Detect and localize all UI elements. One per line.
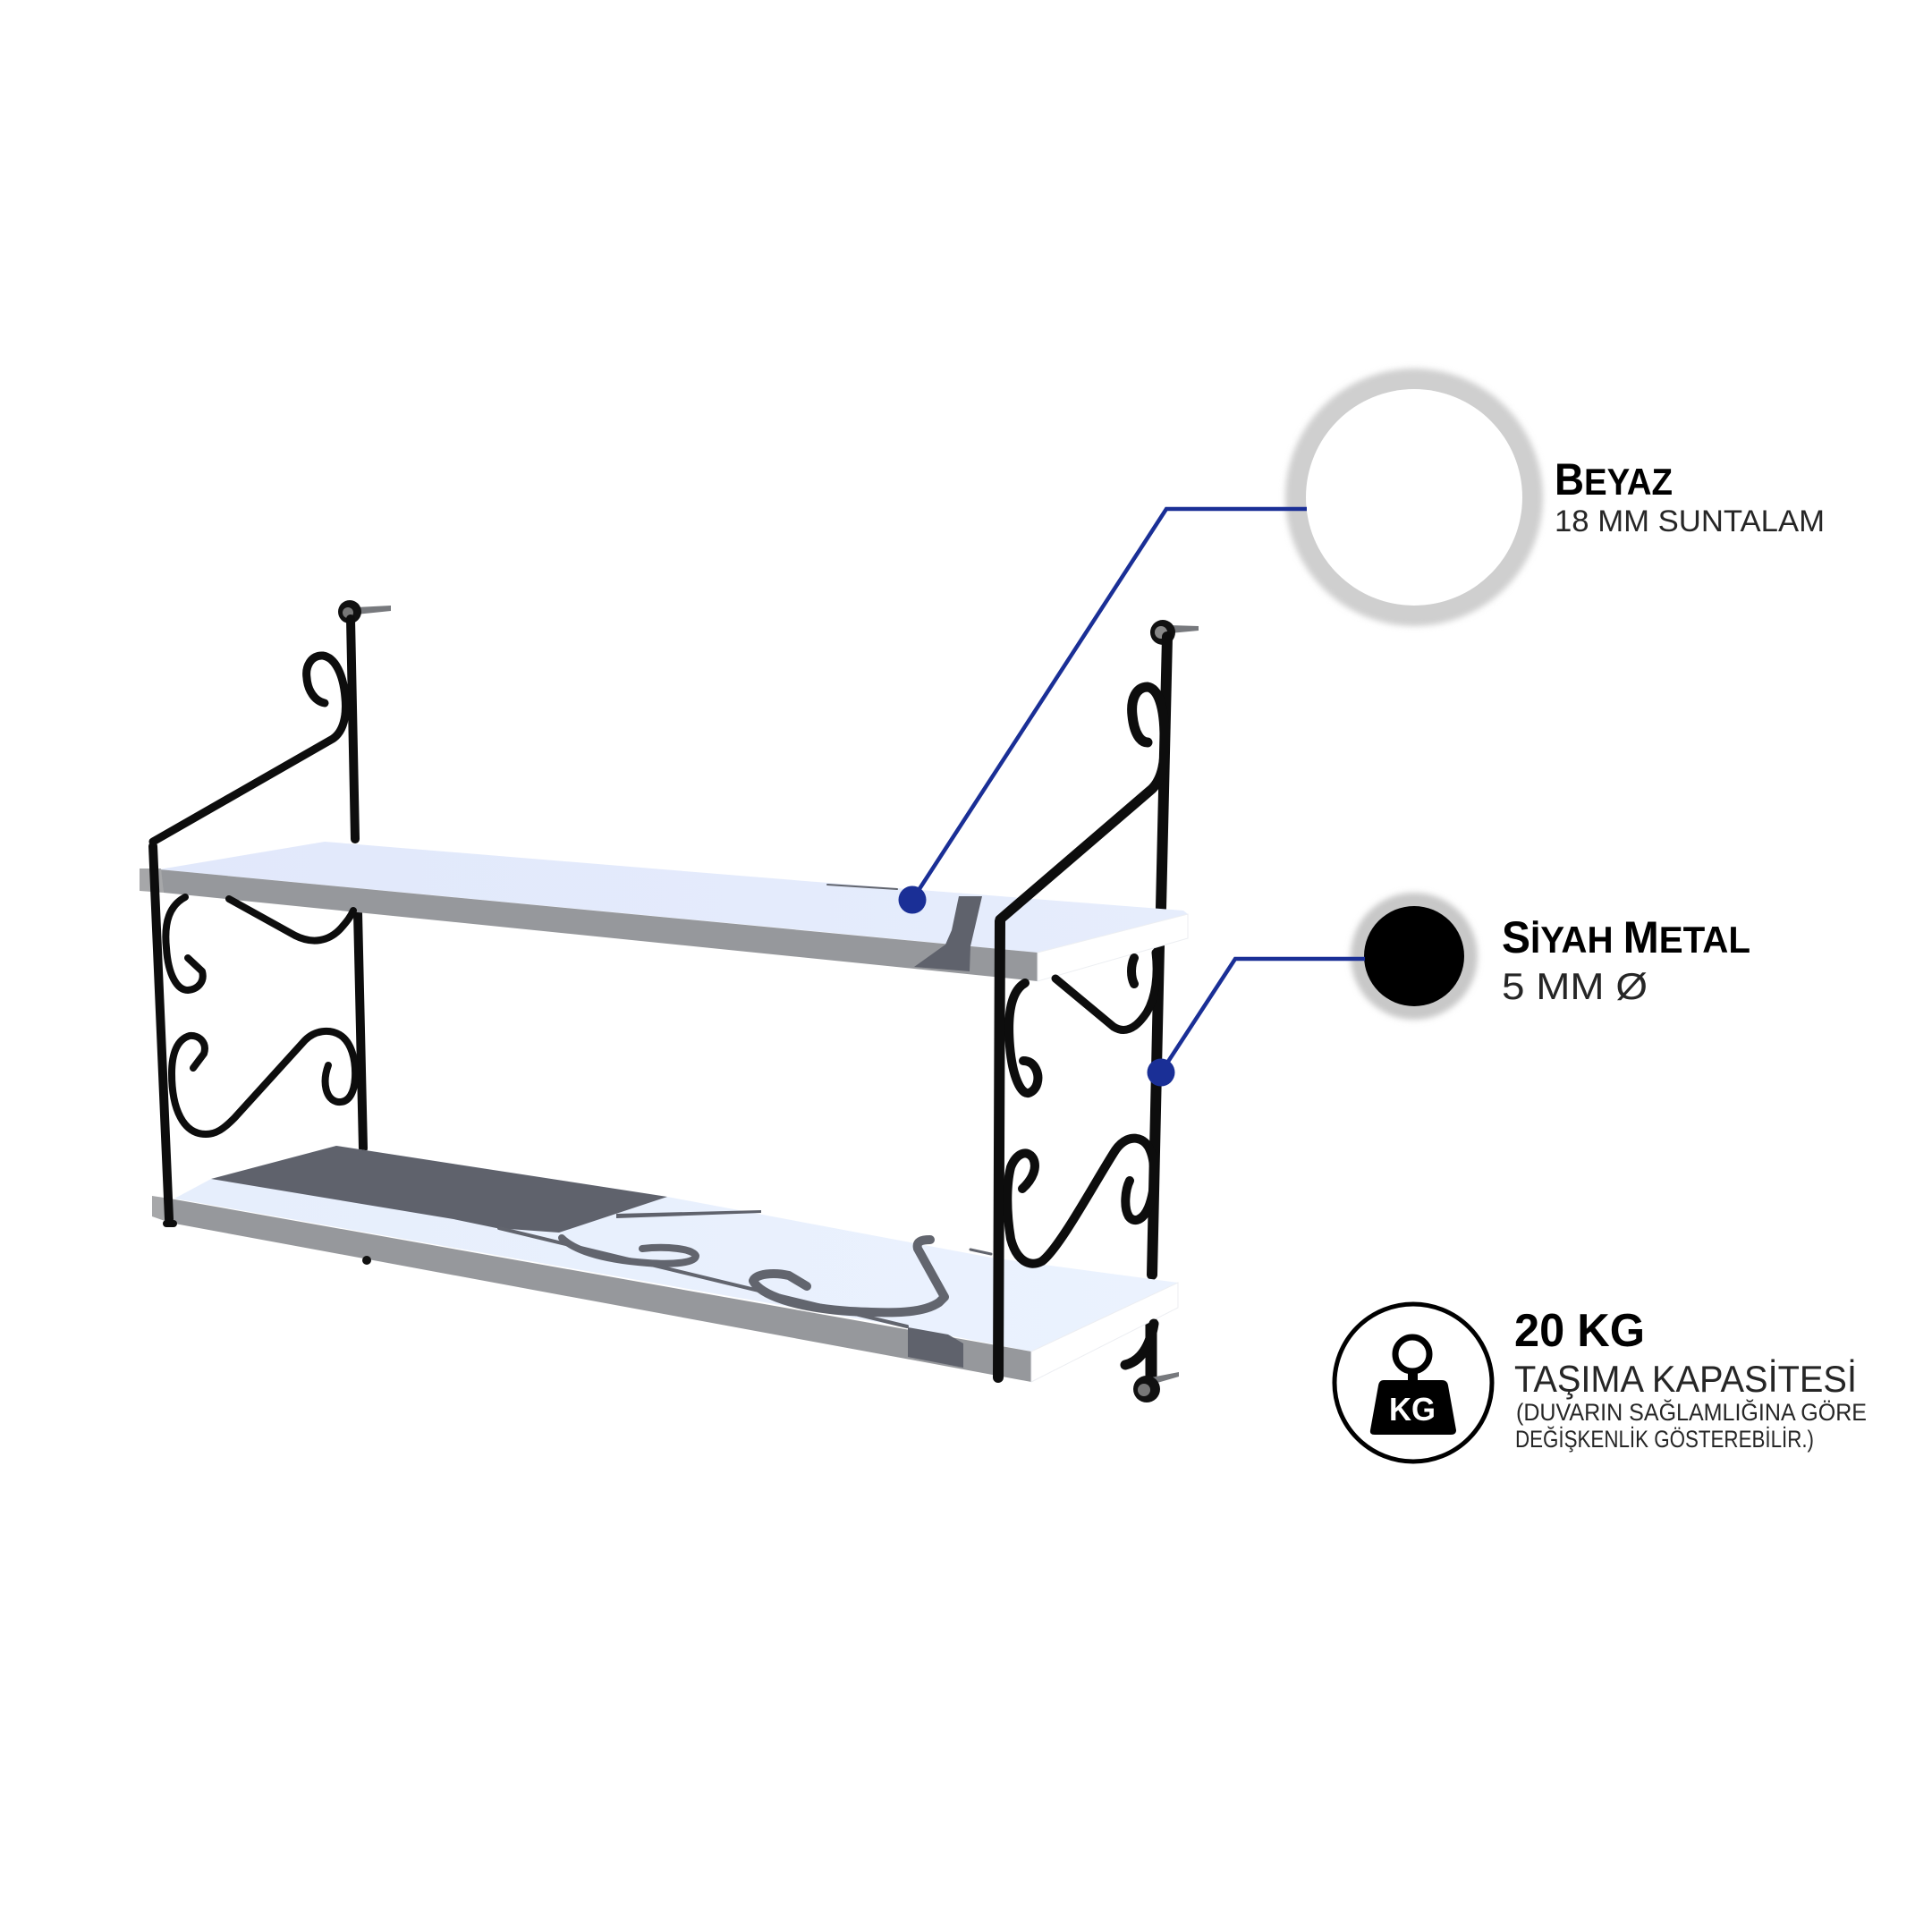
dot: metal marker — [1147, 1059, 1175, 1086]
icon: left top screw — [338, 600, 391, 623]
callout line: shelf material — [898, 509, 1307, 914]
right front bracket — [998, 687, 1165, 1377]
swatch: black — [1351, 893, 1478, 1020]
icon: right bottom screw — [1133, 1372, 1179, 1402]
capacity text: DEĞİŞKENLİK GÖSTEREBİLİR.) — [1515, 1425, 1814, 1453]
shelf right end — [1038, 914, 1188, 981]
upper diagonal scroll — [1055, 953, 1157, 1030]
bottom shelf — [152, 1146, 1178, 1382]
left back post and wall screw — [338, 600, 391, 1148]
shelf right end — [1031, 1283, 1178, 1382]
label: Beyaz: BEYAZ — [1555, 454, 1673, 504]
capacity text: TAŞIMA KAPASİTESİ — [1514, 1358, 1857, 1400]
shelf front edge — [159, 869, 1038, 981]
capacity text: 20 KG — [1514, 1305, 1645, 1357]
lower S scroll — [172, 1031, 355, 1134]
label: Beyaz: 18 MM SUNTALAM — [1555, 504, 1825, 538]
label: Siyah Metal — [1502, 912, 1750, 1007]
upper left scroll — [1009, 983, 1038, 1093]
shelf front edge — [170, 1199, 1031, 1382]
shelf top surface — [174, 1146, 1178, 1352]
capacity text: (DUVARIN SAĞLAMLIĞINA GÖRE — [1516, 1398, 1867, 1426]
right back post and wall screws — [1133, 620, 1199, 1402]
icon: weight: KG — [1389, 1391, 1436, 1428]
upper diagonal scroll — [229, 899, 353, 941]
front post — [998, 921, 1000, 1377]
icon: right top screw — [1150, 620, 1199, 645]
label: Siyah Metal: SİYAH METAL — [1502, 912, 1750, 962]
callout line: metal material — [1147, 959, 1365, 1086]
dark shadow block — [211, 1146, 667, 1233]
shadow stripe on top shelf — [914, 896, 982, 971]
lower S scroll — [1007, 1139, 1154, 1264]
top shelf — [140, 842, 1188, 981]
shadow lines of the bracket — [499, 1210, 991, 1326]
diagonal arm with upper scroll — [1000, 687, 1165, 919]
diagonal arm with upper scroll — [153, 656, 345, 842]
icon: weight — [1335, 1304, 1492, 1462]
dot: shelf marker — [898, 886, 927, 914]
lower hook — [1125, 1324, 1154, 1365]
capacity text — [1514, 1305, 1867, 1453]
label: Siyah Metal: 5 MM Ø — [1502, 965, 1648, 1007]
left front bracket — [153, 656, 371, 1265]
shelf top surface — [159, 842, 1188, 953]
shadow on front edge — [908, 1327, 963, 1368]
upper left scroll — [165, 897, 203, 990]
shelf left end — [152, 1196, 170, 1223]
label: Beyaz — [1555, 454, 1825, 538]
front post — [153, 846, 169, 1219]
foot nub — [362, 1256, 371, 1265]
shelf left end — [140, 869, 164, 893]
swatch: white — [1285, 369, 1543, 626]
